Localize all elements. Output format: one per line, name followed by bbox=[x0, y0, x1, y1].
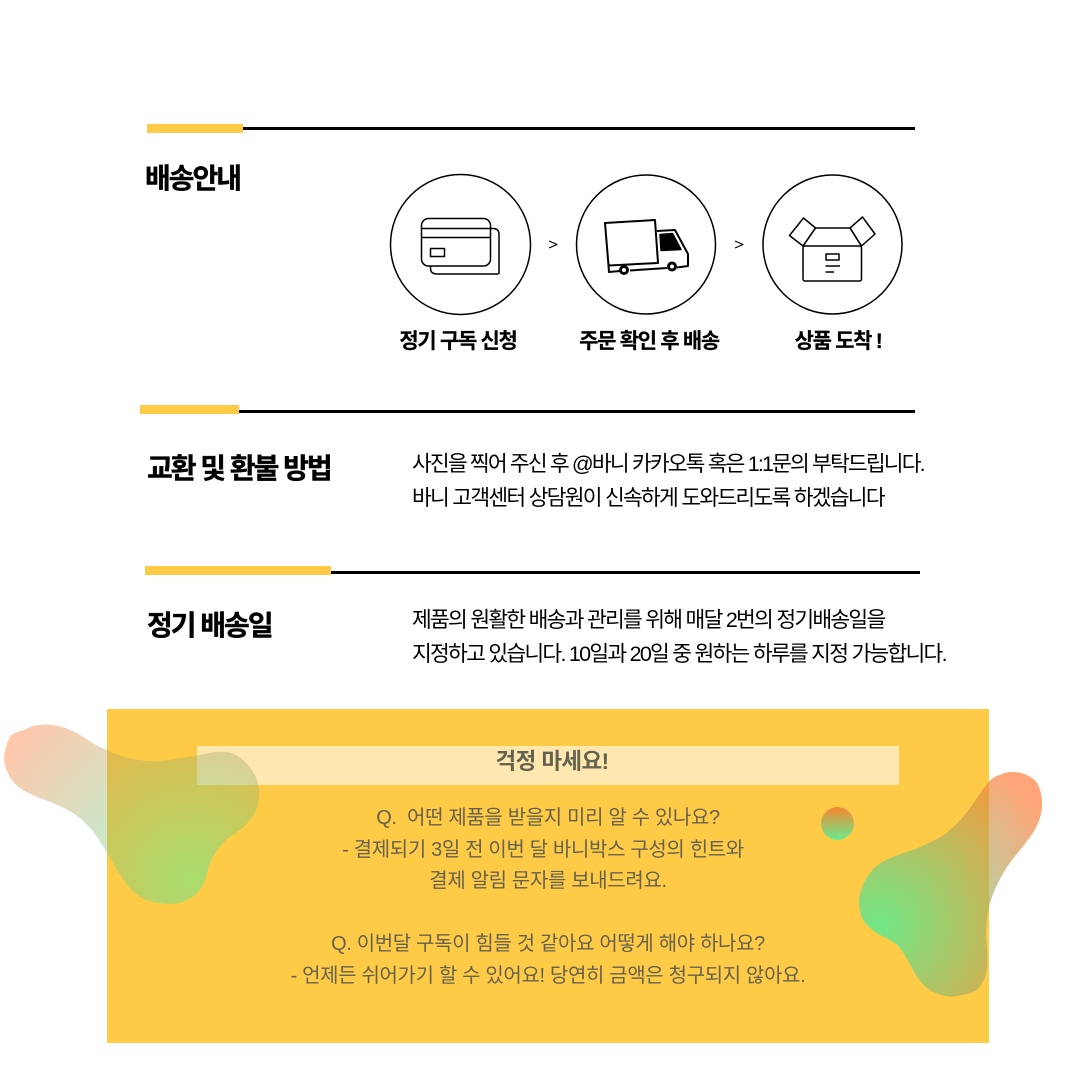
section rule: delivery date bbox=[145, 566, 920, 575]
text: delivery date details bbox=[412, 608, 946, 666]
blob: right bbox=[859, 772, 1042, 997]
delivery steps diagram bbox=[390, 174, 903, 316]
FAQ text: question two bbox=[291, 933, 805, 986]
text: exchange instructions bbox=[412, 452, 924, 510]
icon: delivery truck bbox=[576, 175, 716, 314]
FAQ text: question one: Q. 어떤 제품을 받을지 미리 알 수 있나요? bbox=[376, 807, 720, 829]
FAQ text: question one: 결제 알림 문자를 보내드려요. bbox=[429, 870, 667, 892]
FAQ text: question two: - 언제든 쉬어가기 할 수 있어요! 당연히 금액은 청구되지 않아요. bbox=[291, 964, 805, 986]
text: delivery date details: 제품의 원활한 배송과 관리를 위해 매달 2번의 정기배송일을 bbox=[412, 608, 884, 632]
step label: arrival: 상품 도착 ! bbox=[795, 330, 881, 353]
FAQ text: question one bbox=[342, 807, 744, 892]
FAQ text: question two: Q. 이번달 구독이 힘들 것 같아요 어떻게 해야 하나요? bbox=[331, 933, 765, 955]
text: exchange instructions: 바니 고객센터 상담원이 신속하게 도와드리도록 하겠습니다 bbox=[412, 486, 884, 510]
icon: credit cards bbox=[390, 174, 530, 314]
heading: regular delivery date: 정기 배송일 bbox=[147, 610, 272, 641]
FAQ heading bar bbox=[197, 746, 899, 785]
arrow: step two to three bbox=[735, 241, 743, 248]
icon: opened box bbox=[763, 175, 902, 314]
FAQ text: question one: - 결제되기 3일 전 이번 달 바니박스 구성의 힌트와 bbox=[342, 838, 744, 860]
text: exchange instructions: 사진을 찍어 주신 후 @바니 카카오톡 혹은 1:1문의 부탁드립니다. bbox=[412, 452, 924, 476]
heading: exchange and refund: 교환 및 환불 방법 bbox=[147, 453, 331, 484]
arrow: step one to two bbox=[549, 241, 557, 248]
text: delivery date details: 지정하고 있습니다. 10일과 20일 중 원하는 하루를 지정 가능합니다. bbox=[412, 642, 946, 666]
small gradient dot bbox=[821, 807, 854, 840]
heading: delivery guide: 배송안내 bbox=[145, 163, 240, 194]
step label: subscribe: 정기 구독 신청 bbox=[399, 330, 517, 353]
panel: FAQ bbox=[107, 709, 989, 1043]
step label: order confirmed: 주문 확인 후 배송 bbox=[579, 330, 719, 353]
section rule: exchange bbox=[140, 405, 915, 414]
FAQ heading: 걱정 마세요! bbox=[495, 749, 609, 774]
blob: left bbox=[4, 725, 259, 904]
section rule: delivery bbox=[147, 124, 915, 133]
